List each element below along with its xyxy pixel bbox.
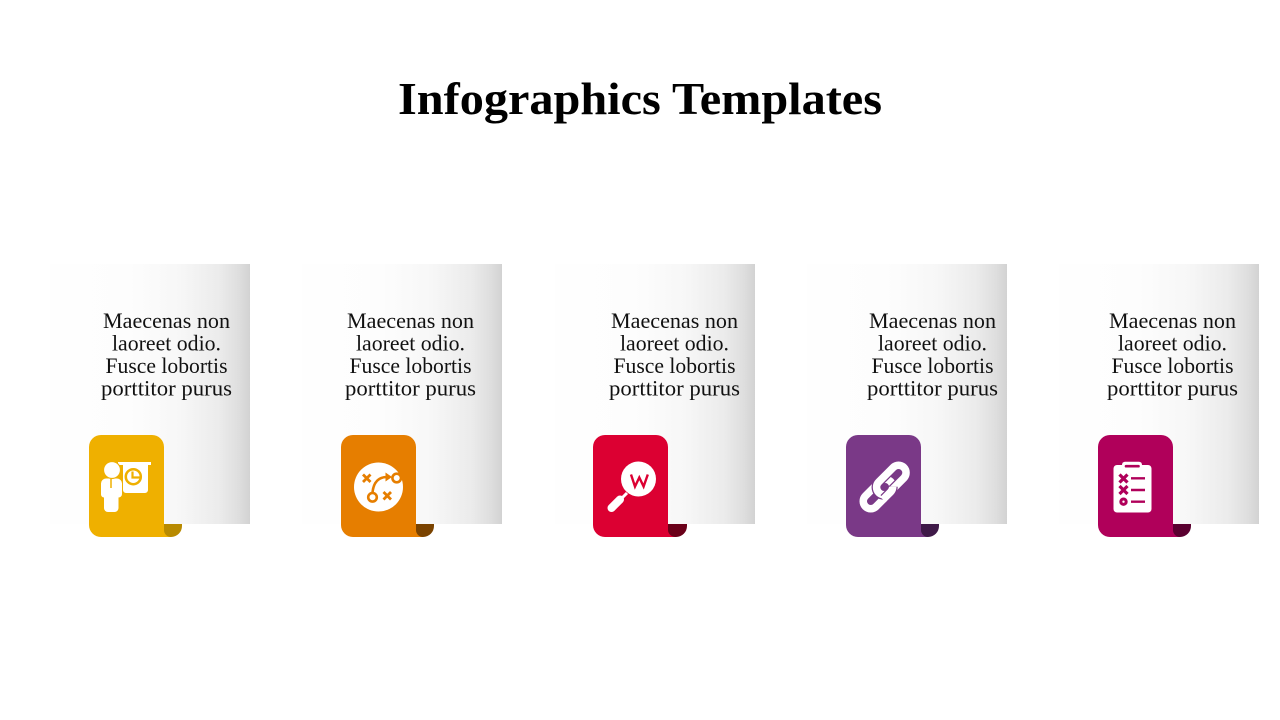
card 1 tab bbox=[89, 435, 171, 537]
card 2 background bbox=[302, 264, 502, 524]
card 4 text: porttitor purus bbox=[867, 376, 998, 400]
panel: card 2 bbox=[302, 264, 502, 537]
card 1 background bbox=[50, 264, 250, 524]
panel: card 5 bbox=[1059, 264, 1259, 537]
card 2 text: laoreet odio. bbox=[356, 330, 465, 356]
card 2 text: porttitor purus bbox=[345, 376, 476, 400]
title: Infographics Templates bbox=[398, 73, 882, 124]
icon: presenter with chart bbox=[101, 462, 151, 512]
card 1 curl bbox=[164, 524, 182, 537]
card 3 background bbox=[555, 264, 755, 524]
panel: card 3 bbox=[555, 264, 755, 537]
icon: strategy play bbox=[354, 462, 403, 512]
card 5 text: porttitor purus bbox=[1107, 376, 1238, 400]
card 2 text bbox=[345, 308, 476, 400]
card 4 tab bbox=[846, 435, 928, 537]
card 1 text: laoreet odio. bbox=[112, 330, 221, 356]
card 1 text bbox=[101, 308, 232, 400]
card 2 curl bbox=[416, 524, 434, 537]
card 2 text: Maecenas non bbox=[347, 308, 474, 333]
card 5 tab bbox=[1098, 435, 1180, 537]
card 2 tab bbox=[341, 435, 423, 537]
card 5 text bbox=[1107, 308, 1238, 400]
card 3 text: porttitor purus bbox=[609, 376, 740, 400]
icon: clipboard checklist bbox=[1114, 462, 1152, 512]
card 4 text: Fusce lobortis bbox=[872, 353, 994, 378]
card 5 text: laoreet odio. bbox=[1118, 330, 1227, 356]
card 5 text: Fusce lobortis bbox=[1112, 353, 1234, 378]
card 4 text: Maecenas non bbox=[869, 308, 996, 333]
card 3 tab bbox=[593, 435, 676, 537]
panel: card 1 bbox=[50, 264, 250, 537]
card 3 text: laoreet odio. bbox=[620, 330, 729, 356]
card 3 text: Maecenas non bbox=[611, 308, 738, 333]
card 5 curl bbox=[1173, 524, 1191, 537]
card 3 text: Fusce lobortis bbox=[614, 353, 736, 378]
card 4 curl bbox=[921, 524, 939, 537]
card 5 background bbox=[1059, 264, 1259, 524]
card 4 text bbox=[867, 308, 998, 400]
icon: chain link bbox=[860, 462, 909, 512]
card 3 text bbox=[609, 308, 740, 400]
card 1 text: Maecenas non bbox=[103, 308, 230, 333]
card 5 text: Maecenas non bbox=[1109, 308, 1236, 333]
card 1 text: Fusce lobortis bbox=[106, 353, 228, 378]
card 1 text: porttitor purus bbox=[101, 376, 232, 400]
icon: magnifier with W bbox=[612, 462, 656, 508]
card 3 curl bbox=[668, 524, 687, 537]
card 4 background bbox=[807, 264, 1007, 524]
panel: card 4 bbox=[807, 264, 1007, 537]
card 2 text: Fusce lobortis bbox=[350, 353, 472, 378]
card 4 text: laoreet odio. bbox=[878, 330, 987, 356]
